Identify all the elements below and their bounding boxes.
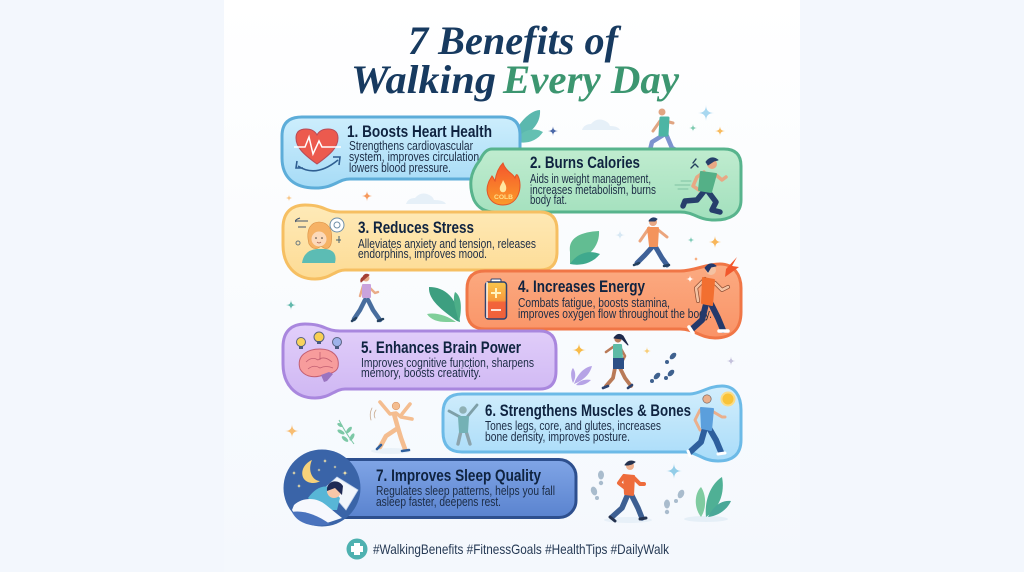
- card 2: burns calories: [471, 149, 741, 220]
- decoration: leaf and sparkle, left of card 4: [286, 287, 461, 322]
- title: 7 Benefits of: [408, 18, 622, 63]
- icon: brain with three light bulbs: [296, 332, 342, 382]
- heading: 4. Increases Energy: [518, 277, 645, 296]
- heading: 5. Enhances Brain Power: [361, 338, 521, 357]
- card 3: reduces stress: [283, 205, 557, 279]
- walker: woman in teal top: [603, 334, 632, 388]
- description: asleep faster, deepens rest.: [376, 495, 501, 509]
- decoration: leaf and sparkles, right of card 3: [570, 230, 722, 265]
- icon: sleeping woman under moon: [284, 450, 360, 526]
- icon: flame: COLB: [494, 194, 513, 201]
- icon: woman with thought bubbles: [295, 218, 344, 263]
- walker: teal shirt, top: [650, 108, 676, 150]
- decoration: sprig and sparkle, left of card 6: [285, 420, 356, 444]
- icon: medical cross badge: [346, 538, 368, 560]
- decoration: footprints, sparkle and leaves, bottom right: [590, 463, 731, 522]
- figure: tan stretching person: [370, 402, 412, 454]
- card 7: improves sleep quality: [284, 450, 576, 526]
- description: Regulates sleep patterns, helps you fall: [376, 484, 555, 498]
- decoration: leaves by card 1: [516, 110, 543, 143]
- icon: sun: [722, 392, 734, 406]
- runner: green shirt: [675, 158, 726, 212]
- card 1: boosts heart health: [282, 117, 520, 188]
- description: [485, 419, 661, 444]
- description: system, improves circulation,: [349, 150, 482, 164]
- decoration: sparkles and clouds, top right: [286, 105, 725, 204]
- title: Walking: [351, 57, 496, 102]
- description: lowers blood pressure.: [349, 161, 451, 175]
- icon: battery: [486, 279, 506, 319]
- heading: 7. Improves Sleep Quality: [376, 466, 541, 485]
- runner: orange shirt with bolt: [686, 257, 739, 333]
- description: Tones legs, core, and glutes, increases: [485, 419, 661, 433]
- description: [518, 296, 712, 321]
- heading: 6. Strengthens Muscles & Bones: [485, 401, 691, 420]
- walker: blue shirt: [688, 395, 725, 456]
- description: Strengthens cardiovascular: [349, 139, 473, 153]
- description: Improves cognitive function, sharpens: [361, 356, 534, 370]
- description: Alleviates anxiety and tension, releases: [358, 237, 536, 251]
- description: body fat.: [530, 193, 567, 207]
- description: [530, 172, 656, 207]
- description: Aids in weight management,: [530, 172, 651, 186]
- heading: 1. Boosts Heart Health: [347, 122, 492, 141]
- description: [349, 139, 482, 175]
- heading: 2. Burns Calories: [530, 153, 640, 172]
- center panel: [224, 0, 800, 572]
- icon: flame: [487, 163, 520, 205]
- description: [376, 484, 555, 509]
- title: Every Day: [502, 57, 679, 102]
- card 6: strengthens muscles and bones: [284, 386, 741, 560]
- description: improves oxygen flow throughout the body.: [518, 307, 712, 321]
- hashtags text: #WalkingBenefits #FitnessGoals #HealthTips #DailyWalk: [373, 541, 670, 557]
- walker: woman in purple top: [352, 274, 383, 321]
- heading: 3. Reduces Stress: [358, 218, 474, 237]
- description: Combats fatigue, boosts stamina,: [518, 296, 670, 310]
- icon: figure with raised arms: [449, 405, 477, 444]
- description: endorphins, improves mood.: [358, 247, 487, 261]
- description: bone density, improves posture.: [485, 430, 630, 444]
- description: memory, boosts creativity.: [361, 366, 481, 380]
- card 5: enhances brain power: [283, 324, 556, 398]
- description: increases metabolism, burns: [530, 183, 656, 197]
- description: [361, 356, 534, 380]
- description: [358, 237, 536, 261]
- card 4: increases energy: [467, 257, 741, 338]
- title: [351, 18, 679, 102]
- footer hashtags: [346, 538, 670, 560]
- walker: orange sweater: [604, 461, 652, 523]
- walker: orange shirt: [634, 218, 669, 266]
- decoration: stars, sprig and footprints, right of card 5: [571, 343, 736, 385]
- icon: heart with pulse: [294, 129, 341, 171]
